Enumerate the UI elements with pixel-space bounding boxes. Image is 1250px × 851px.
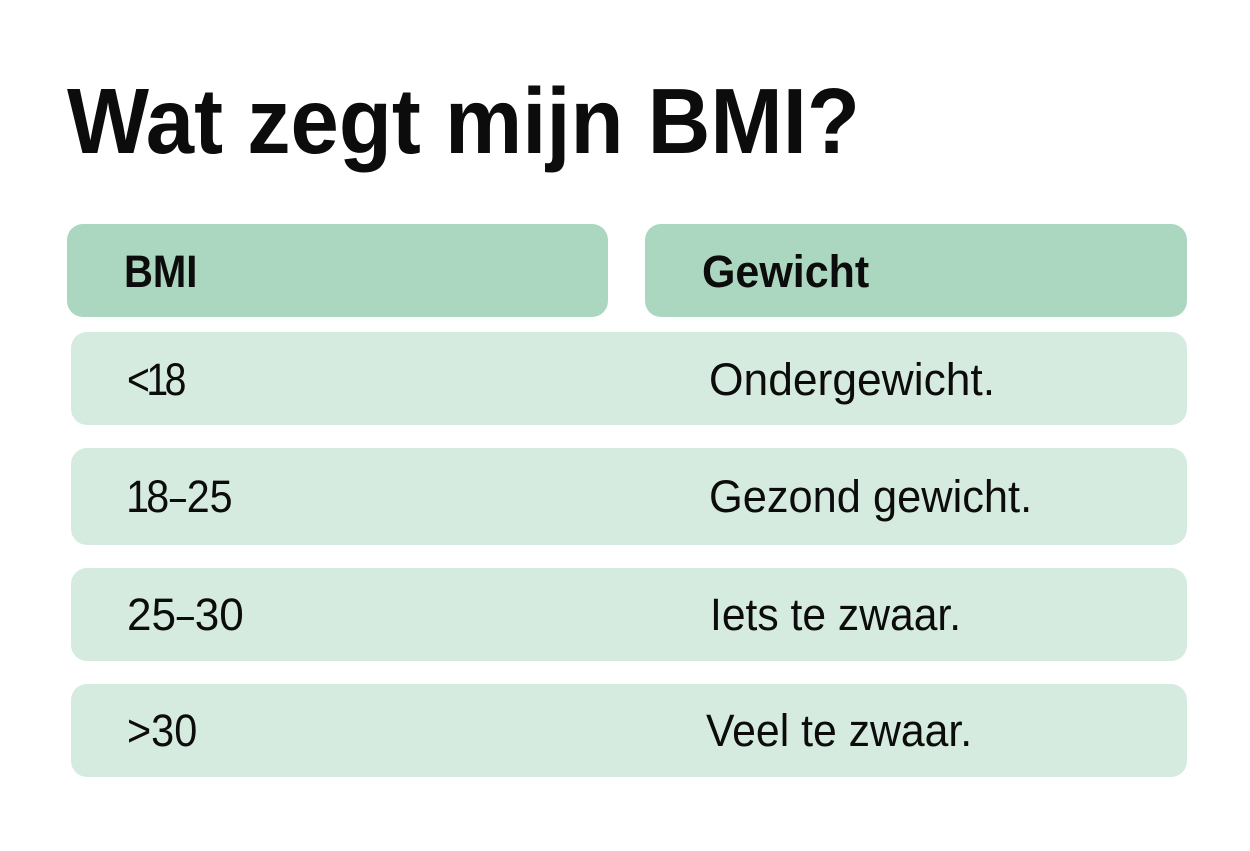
header label: Gewicht: Gewicht — [702, 246, 869, 297]
table header: Gewicht — [645, 224, 1187, 317]
label: Veel te zwaar: Veel te zwaar. — [706, 705, 972, 756]
value: >30: >30 — [127, 705, 197, 756]
value: 18-25: – — [170, 471, 186, 522]
value: 18-25: 18 25 — [126, 471, 233, 522]
label: Iets te zwaar: Iets te zwaar. — [710, 589, 961, 640]
value: <18: <18 — [127, 354, 186, 405]
row: over 30 — [71, 684, 1187, 777]
value: 25-30: – — [177, 589, 194, 640]
row: 18-25 — [71, 448, 1187, 545]
label: Gezond gewicht: Gezond gewicht. — [709, 471, 1032, 522]
row: under 18 — [71, 332, 1187, 425]
label: Ondergewicht: Ondergewicht. — [709, 354, 995, 405]
title: Wat zegt mijn BMI? — [67, 69, 860, 173]
table header: BMI — [67, 224, 608, 317]
row: 25-30 — [71, 568, 1187, 661]
value: 25-30: 25 30 — [127, 589, 244, 640]
header label: BMI: BMI — [124, 246, 197, 297]
